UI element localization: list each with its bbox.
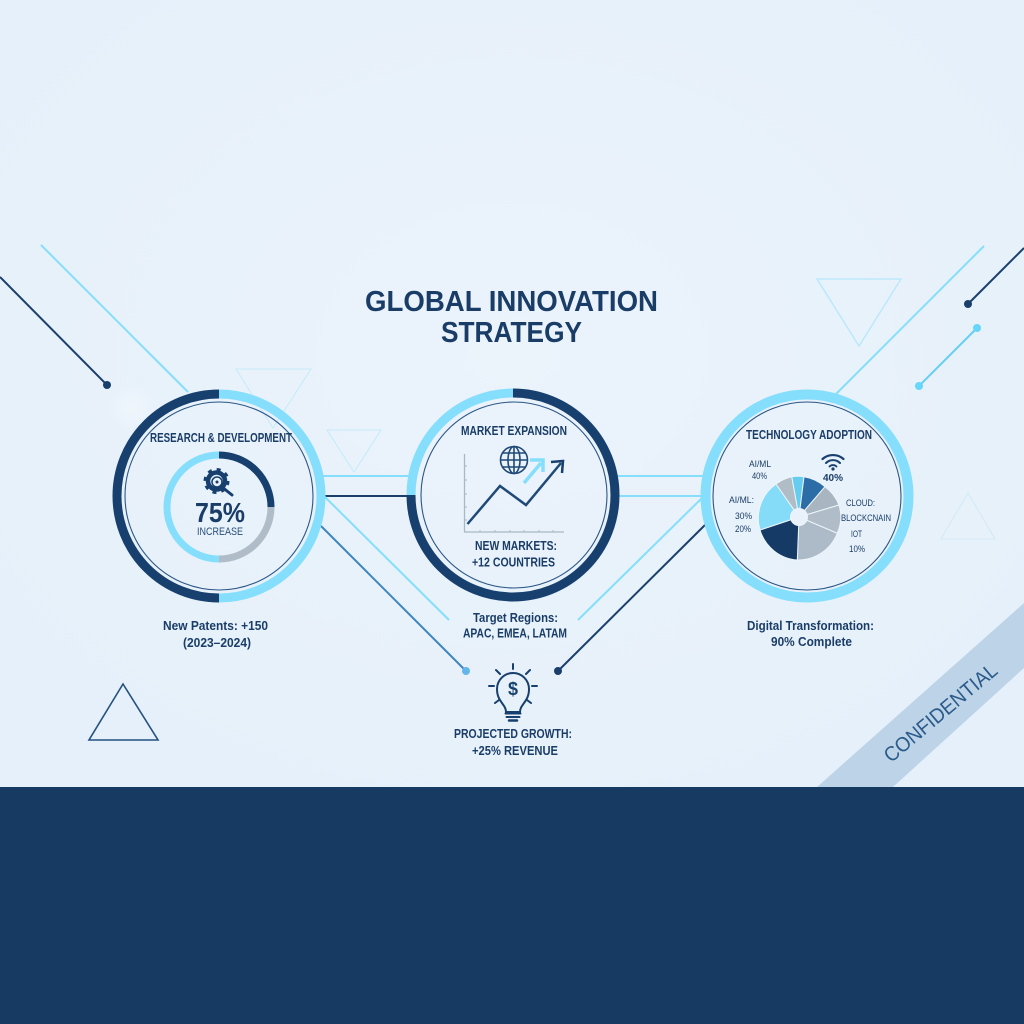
heading: TECHNOLOGY ADOPTION	[746, 428, 872, 442]
caption: target regions: Target Regions:	[473, 611, 558, 625]
title: STRATEGY	[441, 317, 582, 349]
stat: new markets: NEW MARKETS:	[475, 539, 557, 553]
ribbon text: CONFIDENTIAL	[879, 659, 1002, 767]
ring: inner thin	[125, 402, 313, 590]
connector: ring 2 to ring 3 lower	[616, 495, 704, 497]
icon: cyan arrow	[524, 460, 543, 483]
heading: MARKET EXPANSION	[461, 424, 567, 438]
donut chart	[167, 455, 271, 559]
panel: research and development	[117, 394, 321, 598]
connector: ring 1 to ring 2 top	[322, 475, 410, 477]
line: top left cyan	[41, 245, 188, 392]
stat: new markets: +12 COUNTRIES	[472, 556, 555, 570]
ring: outer cyan half	[219, 394, 321, 598]
pie labels: 10%	[849, 544, 865, 555]
title: GLOBAL INNOVATION	[365, 286, 658, 318]
ring: inner thin	[713, 402, 901, 590]
caption: new patents: (2023–2024)	[183, 636, 251, 650]
stat: 75 percent: 75%	[195, 497, 245, 528]
background glow	[108, 384, 156, 432]
dollar sign: $	[508, 679, 518, 699]
triangle: right	[941, 493, 995, 539]
pie labels: AI/ML:	[729, 495, 754, 506]
caption: new patents	[163, 619, 268, 650]
pie labels	[729, 459, 891, 555]
pie labels: 30%	[735, 511, 752, 522]
footer band	[0, 787, 1024, 1024]
pie labels: AI/ML	[749, 459, 771, 470]
connector: left diagonal blue	[321, 526, 470, 675]
stat: new markets	[472, 539, 557, 570]
pie labels: 40%	[823, 473, 843, 484]
caption: projected growth	[454, 727, 572, 758]
icon: wifi	[822, 455, 844, 471]
stat label: INCREASE	[197, 526, 243, 538]
icon: gear and magnifier	[205, 470, 232, 495]
line: top left dark	[0, 277, 111, 389]
connector: right diagonal cyan	[578, 497, 703, 620]
caption: new patents: New Patents: +150	[163, 619, 268, 633]
pie chart	[758, 476, 841, 560]
line: top right dark	[964, 248, 1024, 308]
caption: digital transformation: Digital Transformation:	[747, 619, 874, 633]
icon: light bulb with dollar	[489, 664, 537, 720]
connector: ring 1 to ring 2 dark	[322, 495, 410, 497]
connector: right diagonal dark	[554, 522, 708, 675]
triangle: between rings	[327, 430, 381, 472]
corner accent lines	[0, 245, 1024, 394]
line chart	[464, 454, 564, 532]
ring: outer dark half	[117, 394, 219, 598]
caption: target regions: APAC, EMEA, LATAM	[463, 626, 567, 640]
triangle: bottom left	[89, 684, 158, 740]
confidential ribbon	[817, 603, 1024, 787]
pie labels: 40%	[752, 471, 767, 482]
caption: digital transformation	[747, 619, 874, 649]
heading: RESEARCH & DEVELOPMENT	[150, 431, 292, 445]
connector lines	[321, 476, 708, 675]
triangle: top right	[817, 279, 901, 346]
line: top right cyan	[836, 246, 984, 394]
caption: digital transformation: 90% Complete	[771, 635, 852, 649]
panel: market expansion	[411, 393, 615, 597]
pie labels: IOT	[851, 529, 862, 540]
triangle: above research ring	[236, 369, 311, 428]
pie labels: BLOCKCNAIN	[841, 513, 891, 524]
icon: globe	[500, 446, 528, 474]
pie labels: CLOUD:	[846, 498, 875, 509]
caption: projected growth: +25% REVENUE	[472, 744, 558, 758]
caption: target regions	[463, 611, 567, 640]
decorative triangles	[89, 279, 995, 740]
ring: outer cyan	[706, 394, 908, 598]
connector: ring 2 to ring 3 top	[616, 475, 704, 477]
panel: technology adoption	[706, 394, 908, 598]
ring: outer dark arc	[411, 393, 615, 597]
title	[365, 286, 658, 349]
ring: outer cyan arc	[411, 393, 513, 495]
background	[0, 0, 1024, 787]
caption: projected growth: PROJECTED GROWTH:	[454, 727, 572, 741]
line: right cyan	[915, 324, 981, 390]
ring: inner thin	[421, 402, 607, 588]
connector: left diagonal cyan	[325, 497, 449, 620]
pie labels: 20%	[735, 524, 751, 535]
